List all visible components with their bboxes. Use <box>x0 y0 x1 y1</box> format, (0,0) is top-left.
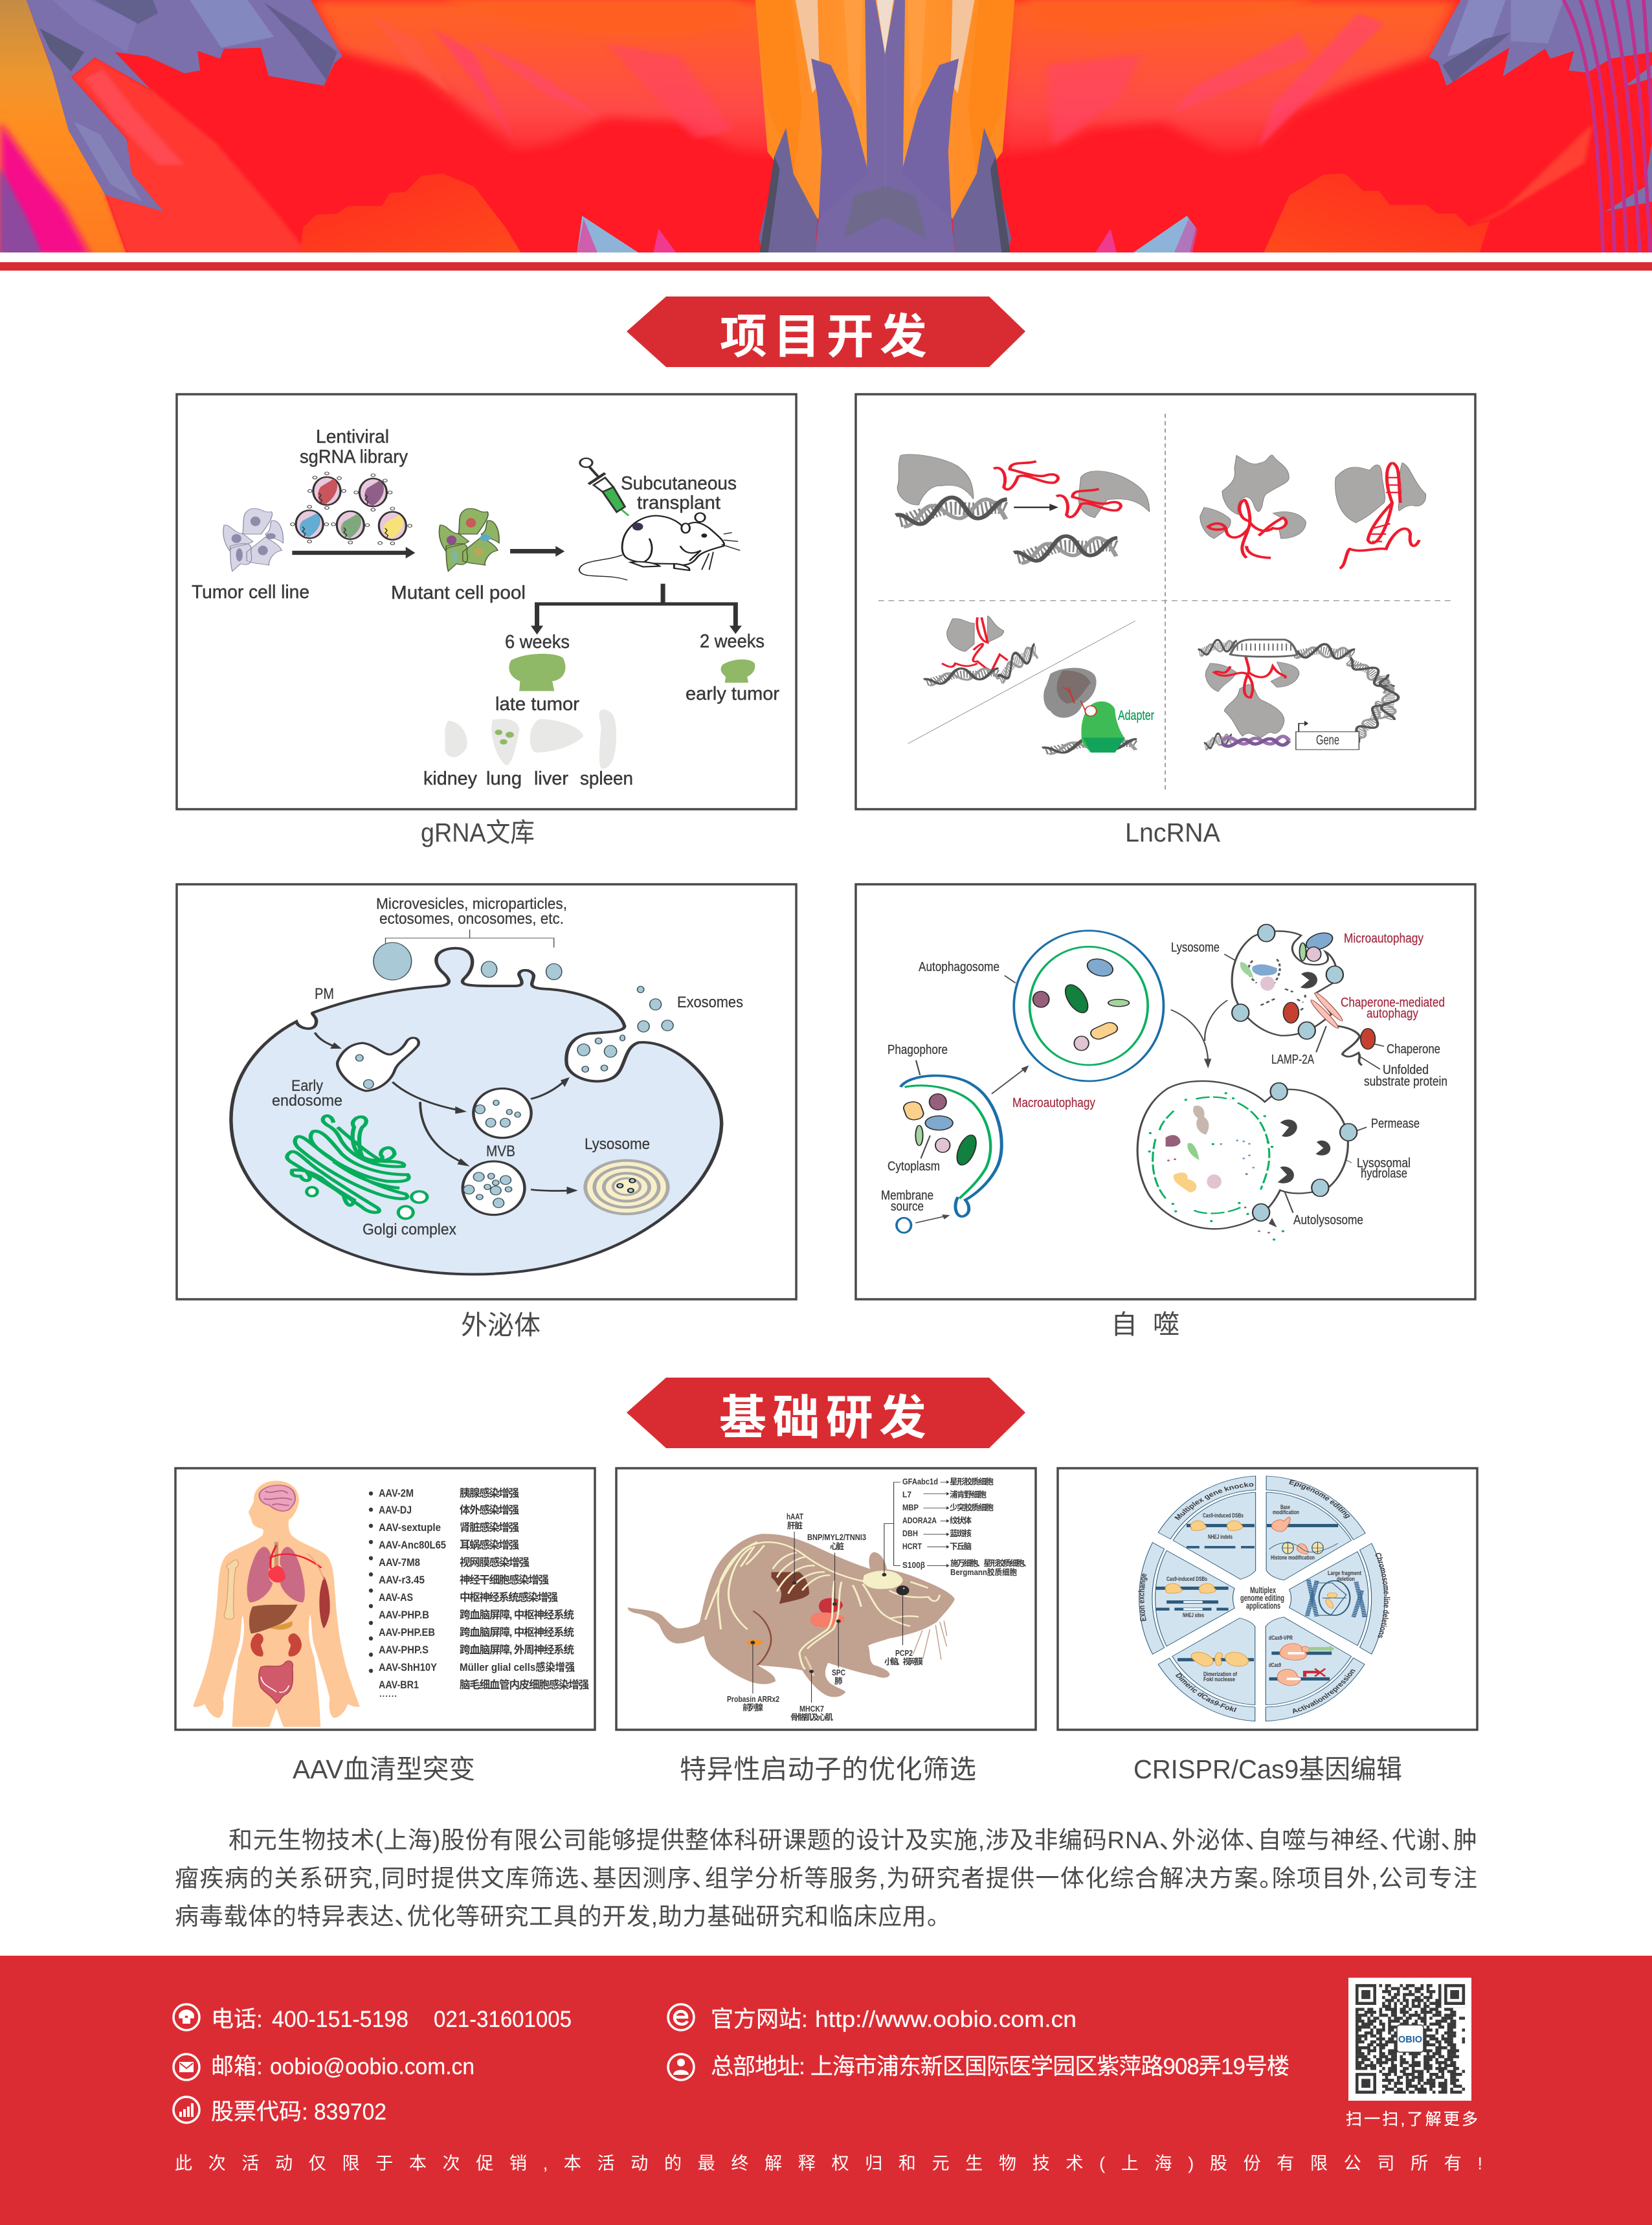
multiplex genome editing wheel: Chromosome-line deletions <box>1375 1552 1390 1638</box>
autophagy labels: Macroautophagy <box>1012 1096 1095 1110</box>
contact: stock code <box>211 2099 386 2125</box>
nerves <box>706 1542 940 1670</box>
wheel centre title <box>1240 1585 1284 1611</box>
Gene label: Gene <box>1316 733 1339 748</box>
contact: phone: 400-151-5198 <box>272 2007 408 2032</box>
gRNA labels <box>192 427 779 789</box>
promoter labels: MHCK7 <box>799 1705 824 1714</box>
whiskers <box>913 1621 947 1660</box>
wheel inner labels: modification <box>1273 1509 1299 1516</box>
wheel inner labels: Dimerization of <box>1203 1671 1238 1678</box>
AAV serotype list: AAV-ShH10Y <box>379 1662 437 1673</box>
autophagy labels: Chaperone <box>1387 1042 1440 1057</box>
arrows and leader lines <box>915 954 1384 1223</box>
autophagy labels: Membrane <box>881 1189 933 1203</box>
gRNA labels: Subcutaneous <box>621 473 737 494</box>
promoter labels: PCP2 <box>895 1649 913 1658</box>
footer band <box>0 1956 1652 2225</box>
LAMP-2A <box>1308 991 1345 1030</box>
gRNA labels: early tumor <box>686 684 779 704</box>
organs <box>445 710 616 769</box>
exosome labels: Golgi complex <box>363 1221 456 1238</box>
kidneys <box>251 1633 263 1657</box>
left edge colour band <box>0 0 126 254</box>
AAV serotype list: 耳蜗感染增强 <box>460 1538 519 1551</box>
liver <box>772 1572 809 1604</box>
AAV serotype list: 跨血脑屏障, 外周神经系统 <box>460 1643 575 1656</box>
promoter labels: S100β <box>902 1561 925 1570</box>
mutant cells <box>439 509 499 571</box>
gRNA labels: Tumor cell line <box>192 582 309 603</box>
left purple spikes <box>27 0 342 89</box>
gRNA labels: kidney <box>423 768 477 789</box>
LncRNA mechanisms drawing <box>878 414 1453 791</box>
syringe <box>580 458 629 516</box>
AAV serotype list: AAV-BR1 <box>379 1679 419 1691</box>
AAV serotype list <box>379 1486 589 1699</box>
prostate <box>746 1640 763 1645</box>
brain <box>260 1485 295 1511</box>
gRNA labels: 2 weeks <box>700 631 765 652</box>
legal notice: 此次活动仅限于本次促销,本活动的最终解释权归和元生物技术(上海)股份有限公司所有! <box>175 2154 1482 2173</box>
AAV serotype list: 体外感染增强 <box>460 1503 519 1516</box>
branching arrows <box>537 584 735 626</box>
eye <box>897 1585 909 1595</box>
multiplex genome editing wheel: Epigenome editing <box>1289 1480 1350 1519</box>
contact: phone <box>211 2007 572 2032</box>
Golgi complex <box>287 1116 409 1213</box>
partially digested cargo <box>1240 962 1299 1023</box>
contact: phone: 021-31601005 <box>434 2007 572 2032</box>
MVB circles <box>463 1088 531 1215</box>
promoter labels: 浦肯野细胞 <box>950 1490 987 1499</box>
icon: email <box>173 2054 199 2080</box>
caption: LncRNA: LncRNA <box>1125 818 1221 847</box>
wheel inner labels: dCas9-VPR <box>1269 1635 1293 1642</box>
promoter labels: L7 <box>902 1490 911 1499</box>
right lower flames <box>1469 124 1592 227</box>
promoter labels: 骨骼肌及心肌 <box>790 1712 833 1722</box>
gRNA labels: liver <box>534 768 568 789</box>
promoter labels: Probasin ARRx2 <box>727 1695 779 1704</box>
autophagy labels: Chaperone-mediated <box>1341 996 1445 1010</box>
multiplex genome editing wheel: Multiplex gene knockouts <box>1174 1482 1253 1520</box>
bone <box>224 1560 238 1619</box>
caption: 自噬 <box>1111 1310 1179 1339</box>
caption: 自噬: 噬 <box>1153 1310 1179 1339</box>
autophagy drawing <box>897 924 1384 1240</box>
gRNA labels: sgRNA library <box>300 447 408 467</box>
vesicles <box>374 943 673 1032</box>
autophagy labels: hydrolase <box>1361 1167 1407 1181</box>
multiplex genome editing wheel: Dimeric dCas9-FokI <box>1173 1672 1238 1714</box>
autolysosome <box>1137 1081 1348 1229</box>
AAV serotype list: AAV-DJ <box>379 1504 412 1516</box>
separator line <box>908 621 1135 744</box>
mouse <box>579 513 740 580</box>
promoter labels: 蓝斑核 <box>950 1528 972 1538</box>
lower left flame <box>300 173 522 254</box>
rat anatomy <box>628 1481 955 1703</box>
autophagy labels: Phagophore <box>887 1043 948 1057</box>
promoter labels: GFAabc1d <box>902 1477 938 1486</box>
company description paragraph: 瘤疾病的关系研究,同时提供文库筛选、基因测序、组学分析等服务,为研究者提供一体化综合解决方案。除项目外,公司专注 <box>175 1865 1477 1892</box>
permeases <box>1232 924 1357 1221</box>
icon: chart <box>173 2097 199 2123</box>
QR code: OBIO <box>1398 2034 1422 2045</box>
hydrolases <box>1278 1119 1330 1183</box>
contact: address: 总部地址: 上海市浦东新区国际医学园区紫萍路908弄19号楼 <box>711 2054 1289 2079</box>
section heading: 项目开发: 项目开发 <box>720 311 927 363</box>
wheel inner labels: Cas9-induced DSBs <box>1166 1576 1207 1583</box>
panel: promoter screening <box>616 1468 1036 1730</box>
multiplex genome editing wheel <box>1046 1457 1391 1721</box>
icon: web <box>668 2004 694 2030</box>
exosome labels: Exosomes <box>677 994 743 1011</box>
AAV serotype list: AAV-AS <box>379 1592 413 1604</box>
exosome labels: Early <box>291 1077 323 1095</box>
Adapter label: Adapter <box>1118 708 1154 723</box>
wheel inner labels: NHEJ indels <box>1208 1534 1233 1541</box>
section heading: 基础研发: 基础研发 <box>719 1392 926 1444</box>
gRNA workflow drawing <box>223 458 755 769</box>
left flame glow <box>311 0 826 156</box>
wheel inner labels: NHEJ sites <box>1183 1612 1204 1619</box>
red RNA strands <box>994 462 1121 517</box>
company description paragraph: 病毒载体的特异表达、优化等研究工具的开发,助力基础研究和临床应用。 <box>175 1903 939 1930</box>
wheel inner labels: Histone modification <box>1271 1554 1315 1561</box>
left shards <box>577 216 640 254</box>
bullets <box>369 1492 373 1673</box>
contact: website: 官方网站: <box>711 2007 808 2032</box>
contact: email: oobio@oobio.com.cn <box>270 2054 474 2079</box>
gRNA labels: 6 weeks <box>505 632 570 653</box>
gRNA labels: Mutant cell pool <box>391 583 526 603</box>
promoter labels: Bergmann胶质细胞 <box>950 1567 1017 1577</box>
autophagy labels <box>881 932 1447 1227</box>
red divider bar <box>0 262 1652 271</box>
phagophore <box>897 1076 1001 1233</box>
autophagy labels: Lysosomal <box>1357 1156 1411 1170</box>
panel: exosome <box>177 884 796 1299</box>
wheel centre title: genome editing <box>1240 1593 1284 1603</box>
exosome labels: Lysosome <box>585 1135 650 1153</box>
arrow <box>292 547 415 559</box>
gRNA labels: late tumor <box>495 694 579 715</box>
contact: email: 邮箱: <box>211 2054 263 2079</box>
autophagy labels: Lysosome <box>1171 941 1220 955</box>
early endosome <box>337 1038 419 1091</box>
caption: 外泌体: 外泌体 <box>461 1310 541 1340</box>
wheel inner labels: dCas9 <box>1269 1662 1281 1669</box>
promoter labels: 星形胶质细胞 <box>950 1477 994 1486</box>
exosome cell drawing <box>231 930 722 1274</box>
autophagosome <box>1014 931 1164 1081</box>
arrows <box>315 1033 571 1191</box>
muscle <box>319 1576 330 1628</box>
AAV serotype list: AAV-PHP.B <box>379 1609 429 1621</box>
contact: stock code: 839702 <box>314 2099 386 2125</box>
gRNA labels: transplant <box>637 493 720 513</box>
promoter labels: 下丘脑 <box>950 1541 972 1551</box>
wheel inner labels: Cas9-induced DSBs <box>1203 1512 1244 1519</box>
caption: 特异性启动子的优化筛选: 特异性启动子的优化筛选 <box>680 1754 976 1784</box>
AAV serotype list: AAV-r3.45 <box>379 1574 425 1586</box>
autophagy labels: Unfolded <box>1383 1063 1429 1077</box>
promoter labels <box>727 1477 1031 1722</box>
organelles <box>902 956 1129 1167</box>
promoter labels: 少突胶质细胞 <box>950 1503 994 1512</box>
AAV serotype list: 跨血脑屏障, 中枢神经系统 <box>460 1626 575 1638</box>
icon: location <box>668 2054 694 2080</box>
section heading: 项目开发 <box>627 296 1025 367</box>
DNA helices <box>896 498 1401 754</box>
exosome labels: PM <box>315 985 334 1003</box>
lysosome rings <box>585 1161 668 1214</box>
lysosome top <box>1232 931 1337 1036</box>
contact: stock code: 股票代码: <box>211 2099 308 2125</box>
wheel inner labels: Large fragment <box>1328 1570 1362 1577</box>
AAV serotype list: AAV-Anc80L65 <box>379 1539 446 1551</box>
left coral band <box>71 58 308 254</box>
heart <box>268 1565 285 1583</box>
promoter labels: ADORA2A <box>902 1516 937 1525</box>
hero centre column <box>755 0 1014 254</box>
protein complex and adapter <box>1044 668 1125 753</box>
autophagy labels: Permease <box>1371 1117 1420 1131</box>
arrow <box>1014 506 1050 509</box>
promoter labels: 小脑、视网膜 <box>884 1657 923 1666</box>
right flame glow <box>1000 0 1458 154</box>
company description paragraph: 和元生物技术(上海)股份有限公司能够提供整体科研课题的设计及实施,涉及非编码RNA、外泌体、自噬与神经、代谢、肿 <box>229 1827 1477 1853</box>
section heading: 基础研发 <box>627 1378 1025 1448</box>
multiplex genome editing wheel: Exon exchange <box>1137 1572 1149 1622</box>
caption: gRNA文库: gRNA文库 <box>421 818 535 847</box>
autophagy labels: substrate protein <box>1364 1075 1447 1089</box>
promoter labels: BNP/MYL2/TNNI3 <box>807 1533 866 1542</box>
right purple spikes <box>1429 0 1652 85</box>
tumors <box>509 654 565 691</box>
promoter labels: SPC <box>832 1668 845 1677</box>
exosome labels: endosome <box>272 1092 342 1110</box>
AAV serotype list: AAV-PHP.EB <box>379 1627 435 1638</box>
activation arrow and repression cross <box>1308 1646 1335 1652</box>
AAV serotype list: 胰腺感染增强 <box>460 1486 519 1499</box>
liver <box>249 1605 298 1634</box>
panel: gRNA library <box>177 394 796 809</box>
promoter labels: MBP <box>902 1503 919 1512</box>
AAV serotype list: ...... <box>379 1689 397 1699</box>
wheel inner labels: Base <box>1280 1504 1290 1511</box>
AAV serotype list: AAV-sextuple <box>379 1522 441 1534</box>
autophagy labels: Autophagosome <box>919 960 999 974</box>
heart <box>819 1598 843 1613</box>
caption: AAV血清型突变: AAV血清型突变 <box>293 1754 475 1784</box>
promoter labels: HCRT <box>902 1542 922 1551</box>
gRNA labels: Lentiviral <box>316 427 389 447</box>
lungs <box>247 1547 273 1602</box>
promoter labels: 肺 <box>834 1677 843 1686</box>
AAV serotype list: Müller glial cells感染增强 <box>460 1660 575 1673</box>
AAV serotype list: 中枢神经系统感染增强 <box>460 1591 558 1604</box>
wheel inner labels: deletion <box>1337 1576 1355 1583</box>
contact: phone: 电话: <box>211 2007 263 2032</box>
right hatching <box>1563 0 1652 254</box>
hero abstract banner <box>0 0 1652 254</box>
AAV serotype list: 肾脏感染增强 <box>460 1521 519 1534</box>
intestine <box>259 1661 293 1703</box>
promoter labels: 肝脏 <box>787 1521 803 1530</box>
autophagy labels: Autolysosome <box>1293 1213 1363 1227</box>
promoter labels: DBH <box>902 1529 918 1538</box>
arrow <box>510 546 564 557</box>
wheel centre title: Multiplex <box>1250 1585 1276 1595</box>
autophagy labels: LAMP-2A <box>1271 1053 1315 1067</box>
promoter labels: 心脏 <box>830 1541 844 1551</box>
promoter labels: 前列腺 <box>742 1703 763 1712</box>
AAV serotype list: 神经干细胞感染增强 <box>460 1573 549 1586</box>
company description paragraph <box>175 1827 1477 1930</box>
autophagy labels: Microautophagy <box>1344 932 1423 946</box>
promoter labels: 施万细胞、星形胶质细胞、 <box>950 1558 1031 1568</box>
right shards <box>1132 216 1196 254</box>
human body organs <box>193 1481 360 1727</box>
panel: CRISPR/Cas9 <box>1046 1457 1477 1730</box>
gRNA labels: spleen <box>580 768 633 789</box>
promoter labels: hAAT <box>787 1512 803 1521</box>
panel: LncRNA <box>856 394 1475 809</box>
exosome labels <box>272 895 743 1238</box>
wheel inner labels <box>1166 1504 1362 1683</box>
caption: CRISPR/Cas9基因编辑: CRISPR/Cas9基因编辑 <box>1133 1754 1402 1784</box>
caption: 自噬: 自 <box>1111 1310 1137 1339</box>
exosome labels: ectosomes, oncosomes, etc. <box>379 910 564 928</box>
autophagy labels: autophagy <box>1367 1007 1418 1021</box>
hero left half <box>0 0 826 254</box>
exosome labels: Microvesicles, microparticles, <box>376 895 567 913</box>
chromatin loop <box>1222 640 1306 746</box>
chromosomes <box>1307 1580 1365 1618</box>
autophagy labels: source <box>891 1200 924 1214</box>
gRNA labels: lung <box>486 768 522 789</box>
QR caption: 扫一扫,了解更多 <box>1346 2110 1478 2129</box>
QR code <box>1348 1978 1471 2101</box>
exosome labels: MVB <box>486 1143 515 1160</box>
contact: website: http://www.oobio.com.cn <box>815 2007 1077 2032</box>
wheel centre title: applications <box>1246 1601 1280 1611</box>
lung <box>810 1613 845 1627</box>
promoter labels: 纹状体 <box>950 1515 972 1525</box>
hero right half <box>1000 0 1652 254</box>
Cas9 blobs <box>1165 1521 1249 1666</box>
AAV serotype list: 脑毛细血管内皮细胞感染增强 <box>460 1678 589 1691</box>
autophagy labels: Cytoplasm <box>887 1159 940 1174</box>
DNA bars <box>1156 1524 1338 1681</box>
microautophagy cargo <box>1300 930 1337 961</box>
AAV serotype list: 视网膜感染增强 <box>460 1556 530 1569</box>
panel: AAV serotype mutants <box>175 1468 595 1730</box>
multiplex genome editing wheel: Activation/repression <box>1290 1668 1357 1715</box>
contact: website <box>711 2007 1077 2032</box>
AAV serotype list: AAV-PHP.S <box>379 1644 429 1656</box>
histones <box>1282 1542 1323 1554</box>
leader lines <box>753 1482 948 1703</box>
wheel inner labels: FokI nuclease <box>1203 1676 1235 1683</box>
AAV serotype list: 跨血脑屏障, 中枢神经系统 <box>460 1608 575 1621</box>
panel: autophagy <box>856 884 1475 1299</box>
icon: phone <box>173 2004 199 2030</box>
AAV serotype list: AAV-7M8 <box>379 1557 420 1569</box>
AAV serotype list: AAV-2M <box>379 1488 414 1499</box>
